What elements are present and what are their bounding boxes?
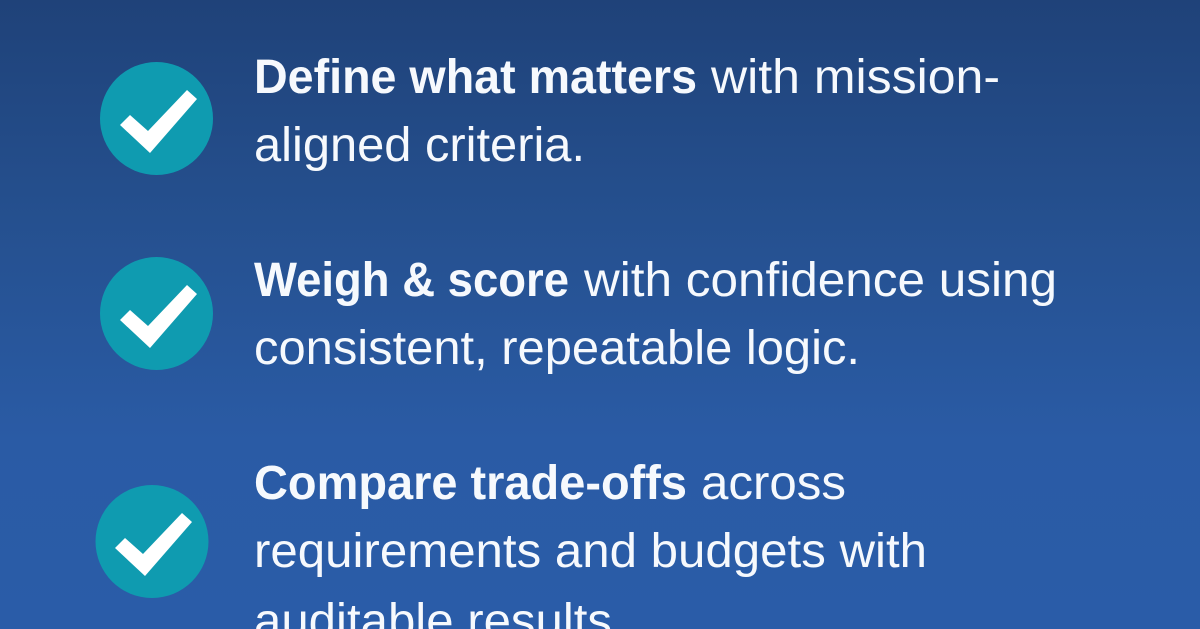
icon: check circle 1	[100, 62, 213, 175]
text: weigh and score: Weigh & score	[254, 254, 569, 307]
text: weigh and score	[254, 254, 1057, 375]
text: define what matters: Define what matters	[254, 51, 697, 104]
text: define what matters: with mission-	[710, 51, 1000, 104]
item 2: weigh and score	[100, 254, 1057, 375]
icon: check circle 2	[100, 257, 213, 370]
text: weigh and score: with confidence using	[583, 254, 1057, 307]
text: weigh and score: consistent, repeatable logic.	[254, 322, 860, 375]
text: define what matters	[254, 51, 1000, 172]
item 1: define what matters	[100, 51, 1000, 175]
item 3: compare trade-offs	[96, 457, 927, 629]
text: compare trade-offs: across	[701, 457, 846, 510]
text: compare trade-offs	[254, 457, 927, 629]
text: define what matters: aligned criteria.	[254, 119, 585, 172]
icon: check circle 3	[96, 485, 208, 598]
text: compare trade-offs: requirements and budgets with	[254, 525, 927, 578]
text: compare trade-offs: Compare trade-offs	[254, 457, 687, 510]
